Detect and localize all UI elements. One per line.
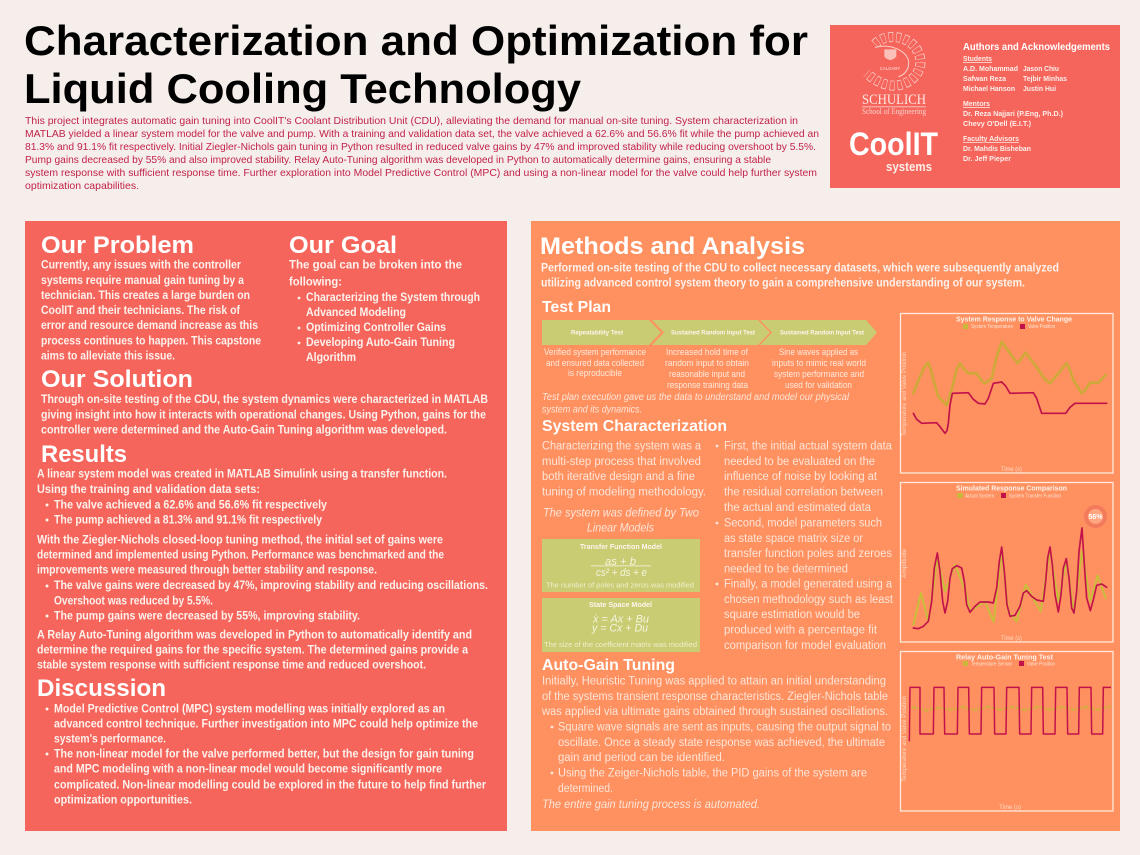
title: Liquid Cooling Technology bbox=[24, 65, 582, 112]
text: characterization intro: multi-step process that involved bbox=[542, 456, 701, 468]
chart: system response to valve change: System Response to Valve Change bbox=[956, 314, 1072, 324]
project summary: optimization capabilities. bbox=[25, 180, 139, 192]
text: characterization steps: First, the initial actual system data bbox=[724, 440, 893, 452]
text: solution: controller were determined and the Auto-Gain Tuning algorithm was developed. bbox=[41, 424, 447, 436]
card: transfer function model bbox=[542, 539, 700, 592]
text: results: The pump gains were decreased by 55%, improving stability. bbox=[54, 610, 360, 622]
text: results: A Relay Auto-Tuning algorithm was developed in Python to automatically identify and bbox=[37, 630, 472, 642]
text: test descriptions: Verified system performance bbox=[544, 347, 646, 357]
text: solution: giving insight into how it interacts with operational changes. Using Python, gains for the bbox=[41, 409, 486, 421]
text: problem: aims to alleviate this issue. bbox=[41, 350, 175, 362]
text: methods intro: utilizing advanced control system theory to gain a comprehensive understanding of our system. bbox=[541, 278, 1025, 290]
chevron process: test plan: Repeatability Test bbox=[571, 330, 623, 336]
text: auto-gain tuning: Square wave signals are sent as inputs, causing the output signal to bbox=[558, 722, 891, 734]
title: Characterization and Optimization for bbox=[24, 17, 808, 64]
heading: Auto-Gain Tuning: Auto-Gain Tuning bbox=[542, 657, 675, 674]
card: state space model: ẋ = Ax + Bu bbox=[592, 614, 649, 626]
text: goal: The goal can be broken into the bbox=[289, 260, 462, 272]
text: results: improvements were measured through better stability and response. bbox=[37, 564, 377, 576]
text: discussion: system's performance. bbox=[54, 734, 166, 746]
text: auto-gain tuning: of the systems transient response characteristics. Ziegler-Nichols table bbox=[542, 691, 888, 703]
text: goal: Algorithm bbox=[306, 352, 356, 364]
card: transfer function model: The number of poles and zeros was modified bbox=[546, 582, 694, 590]
text: discussion: and MPC modeling with a non-linear model would become significantly more bbox=[54, 764, 442, 776]
project summary: Pump gains decreased by 55% and also improved stability. Relay Auto-Tuning algorithm was developed in Python to automatically determine gains, ensuring a stable bbox=[25, 154, 771, 166]
logo: CoolIT systems: CoolIT bbox=[849, 126, 938, 162]
text: auto-gain tuning: Initially, Heuristic Tuning was applied to attain an initial understanding bbox=[542, 676, 886, 688]
chart: system response to valve change bbox=[900, 314, 1113, 473]
chart: relay auto-gain tuning test: Temperature Sensor bbox=[971, 662, 1012, 668]
text: test descriptions: is reproducible bbox=[568, 368, 622, 378]
chart: system response to valve change: Temperature and Valve Position bbox=[901, 351, 908, 436]
text: problem: systems require manual gain tuning by a bbox=[41, 275, 245, 287]
text: discussion: The non-linear model for the valve performed better, but the design for gain tuning bbox=[54, 748, 474, 760]
heading: System Characterization: System Characterization bbox=[542, 418, 727, 435]
text: characterization steps: Second, model parameters such bbox=[724, 518, 882, 530]
text: problem: CoolIT and their technicians. The risk of bbox=[41, 305, 240, 317]
card: transfer function model: cs² + ds + e bbox=[596, 567, 647, 579]
text: characterization steps: comparison for model evaluation bbox=[724, 640, 886, 652]
text: discussion: advanced control technique. Further investigation into MPC could help optimize the bbox=[54, 718, 478, 730]
text: problem bbox=[41, 260, 261, 362]
card: transfer function model: Transfer Function Model bbox=[580, 544, 662, 551]
authors and acknowledgements: Faculty Advisors bbox=[963, 134, 1019, 143]
text: characterization steps: Finally, a model generated using a bbox=[724, 578, 893, 590]
text: auto-gain tuning: gain and period can be identified. bbox=[558, 752, 725, 764]
chevron process: test plan bbox=[542, 320, 877, 345]
donut: 56%: 56% bbox=[1088, 514, 1103, 521]
text: methods intro: Performed on-site testing of the CDU to collect necessary datasets, which were subsequently analyzed bbox=[541, 262, 1059, 274]
project summary: MATLAB yielded a linear system model for the valve and pump. With a training and validation data set, the valve achieved a 62.6% and 56.6% fit while the pump achieved an bbox=[25, 128, 819, 140]
card: state space model: State Space Model bbox=[589, 602, 652, 609]
chart: relay auto-gain tuning test: Temperature and Valve Position bbox=[901, 695, 908, 782]
authors and acknowledgements: Dr. Reza Najjari (P.Eng, Ph.D.) bbox=[963, 109, 1064, 118]
text: goal bbox=[289, 260, 480, 364]
text: results: The pump achieved a 81.3% and 91.1% fit respectively bbox=[54, 514, 323, 526]
panel: authors and logos bbox=[830, 25, 1120, 188]
project summary: This project integrates automatic gain tuning into CoolIT's Coolant Distribution Unit (CDU), alleviating the demand for manual on-site tuning. System characterization in bbox=[25, 115, 798, 127]
text: characterization steps: needed to be determined bbox=[724, 564, 848, 576]
text: results: Overshoot was reduced by 5.5%. bbox=[54, 596, 213, 608]
authors and acknowledgements: Students bbox=[963, 54, 992, 63]
text: auto-gain tuning: determined. bbox=[558, 783, 613, 795]
text: test descriptions: Sine waves applied as bbox=[779, 347, 858, 357]
text: characterization intro bbox=[542, 440, 706, 534]
chart: relay auto-gain tuning test bbox=[900, 652, 1113, 811]
logo: Schulich: SCHULICH bbox=[862, 92, 926, 108]
text: discussion: complicated. Non-linear modelling could be explored in the future to help find further bbox=[54, 780, 486, 792]
panel: problem, goal, solution, results, discussion bbox=[25, 221, 507, 831]
text: problem: error and resource demand increase as this bbox=[41, 320, 258, 332]
authors and acknowledgements: A.D. Mohammad bbox=[963, 64, 1018, 73]
project summary bbox=[25, 115, 819, 192]
chart: simulated response comparison: Amplitude bbox=[901, 548, 908, 578]
text: results: The valve gains were decreased by 47%, improving stability and reducing oscillations. bbox=[54, 580, 488, 592]
card: transfer function model: as + b bbox=[605, 556, 636, 568]
authors and acknowledgements: Tejbir Minhas bbox=[1023, 74, 1067, 83]
heading: Our Problem: Our Problem bbox=[41, 232, 194, 259]
project summary: 81.3% and 91.1% fit respectively. Initial Ziegler-Nichols gain tuning in Python resulted in reduced valve gains by 47% and improved stability while reducing overshoot by 5.5%. bbox=[25, 141, 816, 153]
text: auto-gain tuning bbox=[541, 676, 891, 811]
chevron process: test plan: Sustained Random Input Test bbox=[780, 330, 864, 336]
text: characterization steps: needed to be evaluated on the bbox=[724, 456, 875, 468]
text: solution bbox=[41, 394, 488, 436]
project summary: system response with sufficient response time. Further exploration into Model Predictive Control (MPC) and using a non-linear model for the valve could help further system bbox=[25, 167, 817, 179]
icon: gear logo: CALGARY bbox=[880, 66, 900, 71]
chart: simulated response comparison: Simulated Response Comparison bbox=[956, 484, 1067, 492]
text: results: With the Ziegler-Nichols closed-loop tuning method, the initial set of gains were bbox=[37, 534, 443, 546]
text: discussion: Model Predictive Control (MPC) system modelling was initially explored as an bbox=[54, 704, 445, 716]
authors and acknowledgements: Chevy O'Dell (E.I.T.) bbox=[963, 119, 1032, 128]
text: auto-gain tuning: The entire gain tuning process is automated. bbox=[542, 799, 760, 811]
text: auto-gain tuning: was applied via ultimate gains obtained through sustained oscillations. bbox=[541, 706, 888, 718]
logo: Schulich: School of Engineering bbox=[862, 107, 926, 116]
heading: Our Solution: Our Solution bbox=[41, 366, 193, 393]
authors and acknowledgements: Jason Chiu bbox=[1023, 64, 1059, 73]
text: characterization intro: Linear Models bbox=[587, 522, 654, 534]
text: problem: technician. This creates a large burden on bbox=[41, 290, 250, 302]
text: discussion: optimization opportunities. bbox=[54, 794, 192, 806]
text: goal: Optimizing Controller Gains bbox=[306, 322, 446, 334]
text: characterization intro: both iterative design and a fine bbox=[542, 471, 695, 483]
chart: simulated response comparison: Time (s) bbox=[1001, 635, 1022, 642]
text: characterization steps: as state space matrix size or bbox=[724, 533, 863, 545]
chart: simulated response comparison: Actual System bbox=[965, 494, 994, 500]
chart: system response to valve change: Valve Position bbox=[1028, 324, 1055, 330]
chart: relay auto-gain tuning test: Valve Position bbox=[1027, 662, 1055, 668]
text: test plan note: system and its dynamics. bbox=[542, 404, 642, 416]
text: results: Using the training and validation data sets: bbox=[37, 484, 260, 496]
text: test descriptions: Increased hold time of bbox=[666, 347, 748, 357]
text: goal: following: bbox=[289, 277, 342, 289]
text: characterization steps: chosen methodology such as least bbox=[724, 594, 894, 606]
card: state space model bbox=[542, 598, 700, 652]
text: characterization steps: produced with a percentage fit bbox=[724, 624, 878, 636]
text: characterization steps: the actual and estimated data bbox=[724, 502, 872, 514]
authors and acknowledgements: Justin Hui bbox=[1023, 84, 1056, 93]
text: problem: Currently, any issues with the controller bbox=[41, 260, 241, 272]
text: test plan note: Test plan execution gave us the data to understand and model our physical bbox=[542, 392, 850, 403]
text: test descriptions: inputs to mimic real world bbox=[772, 358, 866, 368]
text: results: stable system response with sufficient response time and reduced overshoot. bbox=[37, 660, 426, 672]
text: results: The valve achieved a 62.6% and 56.6% fit respectively bbox=[54, 500, 328, 512]
text: test descriptions: reasonable input and bbox=[669, 369, 745, 379]
text: problem: process continues to happen. This capstone bbox=[41, 335, 261, 347]
logo: CoolIT systems: systems bbox=[886, 159, 932, 174]
text: characterization steps: square estimation would be bbox=[724, 609, 860, 621]
text: test descriptions: and ensured data collected bbox=[546, 358, 644, 368]
chart: relay auto-gain tuning test: Time (s) bbox=[999, 804, 1021, 811]
title bbox=[24, 17, 808, 112]
chevron process: test plan: Sustained Random Input Test bbox=[671, 330, 755, 336]
text: results bbox=[37, 468, 488, 672]
text: test descriptions: used for validation bbox=[785, 380, 852, 390]
text: goal: Advanced Modeling bbox=[306, 307, 406, 319]
heading: Our Goal: Our Goal bbox=[289, 232, 397, 259]
card: state space model: The size of the coefficient matrix was modified bbox=[544, 642, 697, 649]
text: characterization intro: tuning of modeling methodology. bbox=[542, 486, 706, 498]
text: characterization steps: influence of noise by looking at bbox=[724, 471, 878, 483]
text: characterization intro: The system was defined by Two bbox=[543, 508, 700, 520]
text: goal: Characterizing the System through bbox=[306, 292, 480, 304]
chart: simulated response comparison bbox=[900, 482, 1113, 642]
text: characterization steps: transfer function poles and zeroes bbox=[724, 548, 892, 560]
logo: CoolIT systems bbox=[849, 126, 938, 174]
authors and acknowledgements: Safwan Reza bbox=[963, 74, 1007, 83]
chart: system response to valve change: Time (s) bbox=[1001, 466, 1022, 473]
text: test descriptions: random input to obtain bbox=[665, 358, 749, 368]
text: auto-gain tuning: oscillate. Once a steady state response was achieved, the ultimate bbox=[558, 737, 885, 749]
text: results: determined and implemented using Python. Performance was benchmarked and the bbox=[37, 550, 444, 562]
text: characterization intro: Characterizing the system was a bbox=[542, 440, 702, 452]
text: results: determine the required gains for the specific system. The determined gains provide a bbox=[37, 644, 469, 656]
text: solution: Through on-site testing of the CDU, the system dynamics were characterized in MATLAB bbox=[41, 394, 488, 406]
chart: relay auto-gain tuning test: Relay Auto-Gain Tuning Test bbox=[956, 652, 1054, 662]
text: characterization steps bbox=[716, 440, 894, 652]
text: test descriptions bbox=[544, 347, 866, 390]
heading: Test Plan: Test Plan bbox=[542, 299, 611, 316]
panel: methods and analysis bbox=[531, 221, 1120, 831]
logo: Schulich bbox=[862, 92, 926, 116]
authors and acknowledgements: Mentors bbox=[963, 99, 990, 108]
heading: Methods and Analysis: Methods and Analysis bbox=[540, 233, 805, 260]
chart: system response to valve change: System Temperature bbox=[971, 324, 1013, 330]
heading: Discussion: Discussion bbox=[37, 675, 166, 702]
text: discussion bbox=[46, 704, 486, 806]
text: test descriptions: response training data bbox=[667, 380, 748, 390]
text: characterization steps: the residual correlation between bbox=[724, 486, 883, 498]
text: auto-gain tuning: Using the Zeiger-Nichols table, the PID gains of the system are bbox=[558, 768, 867, 780]
authors and acknowledgements: Dr. Jeff Pieper bbox=[963, 154, 1011, 163]
text: test descriptions: system performance and bbox=[774, 369, 864, 379]
authors and acknowledgements bbox=[963, 42, 1111, 163]
donut: 56% bbox=[1086, 507, 1105, 526]
chart: simulated response comparison: System Transfer Function bbox=[1009, 494, 1061, 500]
authors and acknowledgements: Dr. Mahdis Bisheban bbox=[963, 144, 1031, 153]
icon: gear logo bbox=[867, 37, 920, 86]
authors and acknowledgements: Michael Hanson bbox=[963, 84, 1015, 93]
text: test plan note bbox=[542, 392, 850, 416]
text: results: A linear system model was created in MATLAB Simulink using a transfer function. bbox=[37, 468, 447, 480]
heading: Results: Results bbox=[41, 441, 127, 468]
text: goal: Developing Auto-Gain Tuning bbox=[306, 337, 455, 349]
card: state space model: y = Cx + Du bbox=[591, 622, 648, 634]
authors and acknowledgements: Authors and Acknowledgements bbox=[963, 42, 1111, 53]
text: methods intro bbox=[541, 262, 1059, 290]
